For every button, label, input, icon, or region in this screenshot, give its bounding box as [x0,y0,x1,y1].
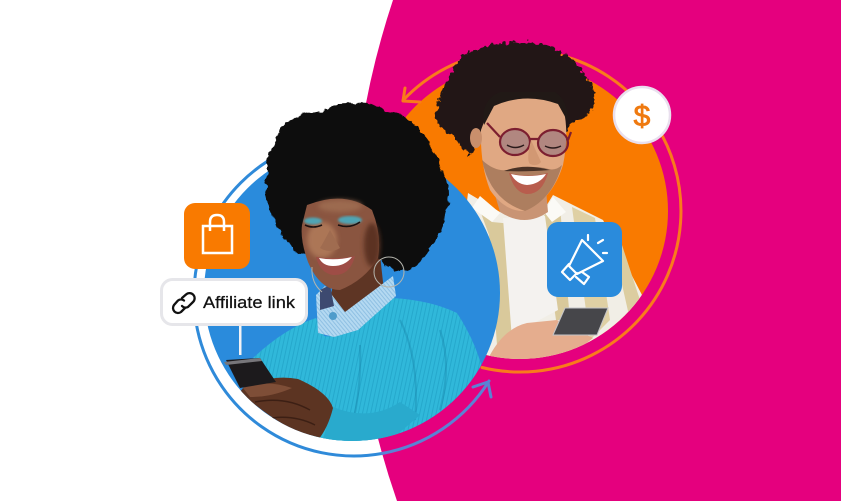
blue circular arrow [194,154,491,456]
icon: dollar sign: $ [634,100,651,133]
man phone [553,308,608,335]
man hair [435,42,595,156]
man moustache [504,167,550,171]
man photo [435,42,642,375]
megaphone tile [547,222,622,297]
woman smile [316,256,355,275]
woman face highlight [307,200,380,267]
man neck [490,178,548,220]
pink background shape [352,0,841,501]
woman phone [224,358,276,388]
woman face [302,199,379,290]
woman eyelashes [305,222,360,227]
man glasses [487,123,571,156]
woman photo [224,103,485,445]
shopping bag tile [184,203,250,269]
dollar badge [614,87,670,143]
man hair fringe [483,92,568,125]
woman neck [330,255,385,322]
woman hand [240,378,333,440]
man nose [528,140,541,165]
woman collar [316,276,396,337]
blue circle [204,145,500,441]
woman hair [266,103,449,271]
pill label: Affiliate link [203,293,296,312]
man ear [470,128,482,148]
woman eyeshadow [304,216,362,224]
man smile [509,173,548,194]
woman earrings [312,257,404,292]
icon: shopping bag [203,215,232,253]
woman shirt button [329,312,337,320]
man beard [482,160,562,211]
orange circle [372,63,668,359]
affiliate link pill [162,280,306,324]
connector line [239,324,242,355]
woman nose [320,230,340,251]
woman sweater [240,298,485,445]
icon: megaphone [562,235,607,284]
icon: chain link [173,293,195,313]
orange circular arrow [403,50,681,372]
man eyelids [507,145,561,148]
man shirt [467,193,642,359]
man face [481,98,566,211]
